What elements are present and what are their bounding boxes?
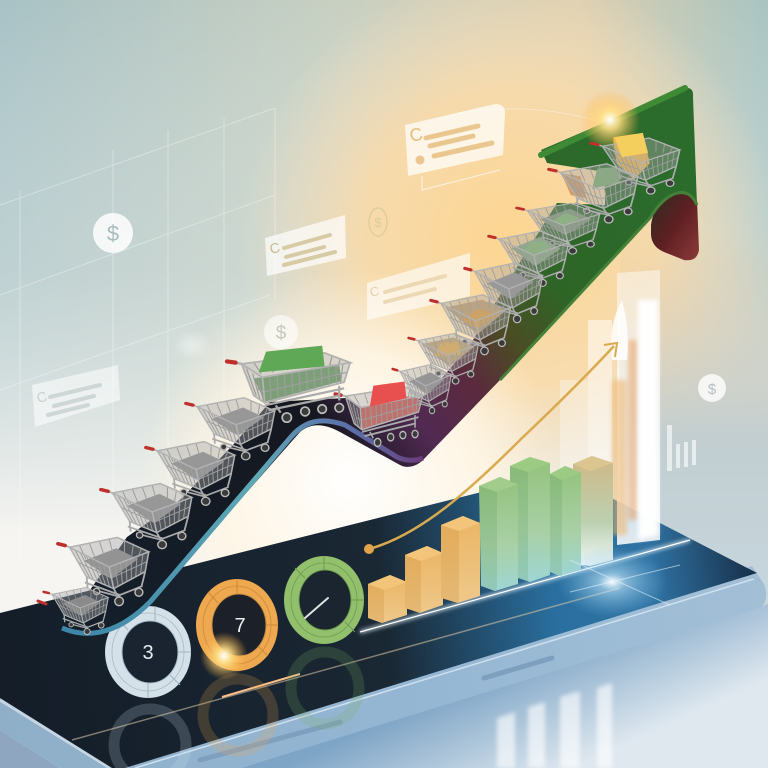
shopping cart 14 green xyxy=(549,164,638,223)
icon: dollar coin centre: $ xyxy=(276,323,287,344)
shopping cart 9 orange xyxy=(409,333,478,384)
rising arrow ramp xyxy=(50,88,699,634)
bar 2 xyxy=(405,546,443,613)
shopping cart 13 green xyxy=(517,203,600,254)
screen glare lines xyxy=(72,540,690,740)
ring gauge 1 xyxy=(105,606,191,698)
shopping cart 3 grey xyxy=(101,484,192,549)
shopping cart 5 grey xyxy=(186,398,275,460)
floating card: behind ramp: C xyxy=(368,283,381,300)
ring gauge 2: 7 xyxy=(234,615,246,637)
shopping cart 1 small grey xyxy=(44,588,108,635)
ring gauge 2 xyxy=(196,579,278,680)
floating card: left xyxy=(32,365,120,427)
icon: dollar coin right: $ xyxy=(708,381,717,398)
bar 6 xyxy=(550,466,581,576)
trend line with arrow xyxy=(364,343,617,554)
shopping cart 6 large green xyxy=(227,346,350,422)
icon: dollar coin centre xyxy=(264,315,298,349)
shopping cart 7 red xyxy=(335,382,423,446)
shopping cart 11 grey xyxy=(465,263,543,323)
bar chart xyxy=(368,456,613,623)
arrow underside fold xyxy=(651,190,699,260)
floating card: centre xyxy=(265,215,346,276)
arrow tip sparkle xyxy=(580,90,640,150)
floating card: behind ramp xyxy=(367,253,470,320)
mini bar chart icon xyxy=(667,425,696,471)
small second handle xyxy=(38,601,46,604)
floating card: top right: C xyxy=(408,124,425,146)
floating card: top right xyxy=(405,104,505,190)
bar 7 xyxy=(573,456,613,566)
screen light flare xyxy=(557,546,680,618)
bar 1 xyxy=(368,575,407,623)
smartphone xyxy=(0,472,766,768)
bar 5 xyxy=(510,457,550,582)
floating card: centre: C xyxy=(268,239,282,257)
glass pillars behind bars xyxy=(560,270,660,550)
icon: faint coin upper centre: $ xyxy=(374,215,382,230)
shopping cart 4 grey xyxy=(146,442,235,505)
shopping cart 12 green xyxy=(489,231,569,286)
shopping cart 8 grey xyxy=(393,364,451,414)
icon: dollar coin left: $ xyxy=(107,221,119,246)
phone screen xyxy=(0,472,757,768)
bar 4 xyxy=(479,477,518,591)
icon: dollar coin left xyxy=(93,213,133,253)
arrow ribbon body xyxy=(50,88,697,634)
shopping cart 10 orange xyxy=(431,295,511,355)
floating card: left: C xyxy=(35,388,49,406)
bar 3 xyxy=(441,516,480,603)
ring reflections xyxy=(114,652,359,768)
floor with reflections xyxy=(0,604,768,768)
shopping cart 2 grey xyxy=(58,537,149,606)
glowing ramp edge xyxy=(62,421,423,633)
phone rim xyxy=(0,566,766,768)
sparkle left xyxy=(180,337,204,353)
ring gauge 3 xyxy=(284,556,364,644)
icon: dollar coin right xyxy=(698,374,726,402)
ring gauge 1: 3 xyxy=(142,642,154,664)
shopping cart 15 yellow xyxy=(591,133,680,194)
icon: faint coin upper centre xyxy=(369,208,387,236)
